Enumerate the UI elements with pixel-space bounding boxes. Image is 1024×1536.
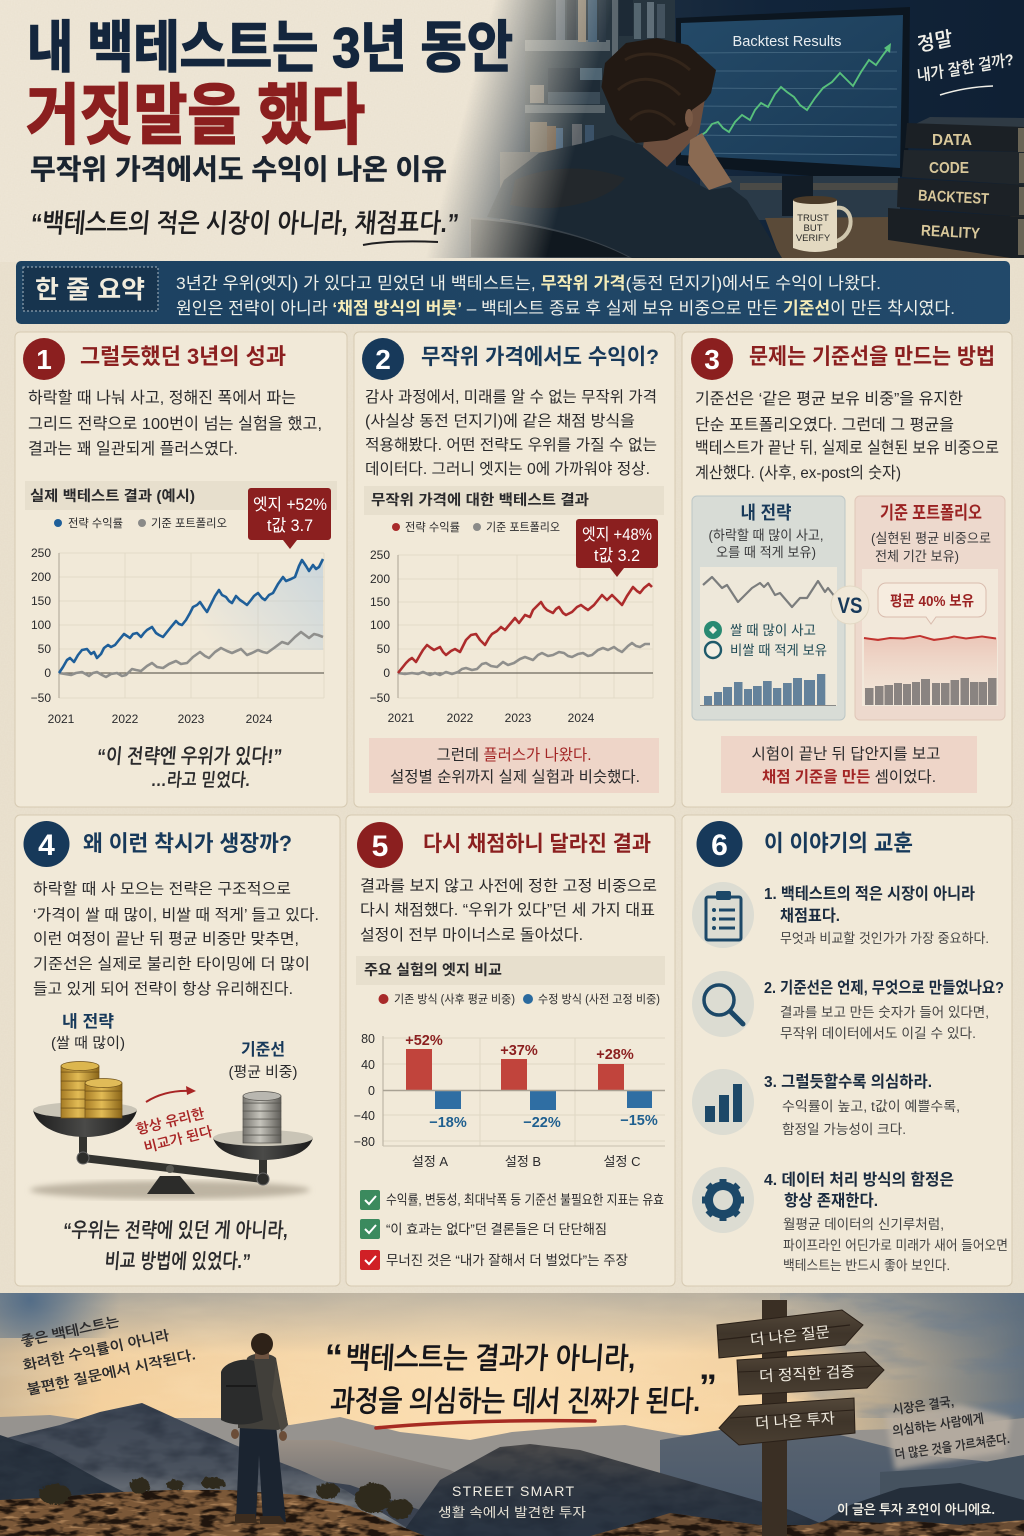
lesson 1: 1. 백테스트의 적은 시장이 아니라: [764, 885, 975, 903]
chart: real backtest result: −50: [31, 691, 51, 705]
icon: office chair: [470, 218, 632, 258]
bar chart: edge comparison: 0: [368, 1084, 375, 1098]
bar chart: edge comparison: −15%: [620, 1113, 658, 1129]
panel 2: profit even on random prices: [354, 332, 675, 807]
chart: real backtest result: 50: [38, 642, 51, 656]
handwritten note: did I really do well: 내가 잘한 걸까?: [916, 50, 1015, 85]
icon: bookshelves behind the analyst: [500, 0, 675, 227]
check item: metrics: [360, 1190, 664, 1210]
chart: real backtest result: 2023: [178, 712, 205, 726]
legend: [378, 993, 660, 1006]
sign: better question: [717, 1310, 863, 1358]
VS badge: [831, 586, 869, 624]
bar chart: edge comparison: 설정 C: [604, 1154, 640, 1169]
icon: stacked books: [888, 117, 1024, 258]
footer main quote: 백테스트는 결과가 아니라,: [345, 1343, 637, 1375]
handwritten note: did I really do well: [916, 27, 1015, 95]
footer main quote: 과정을 의심하는 데서 진짜가 된다.: [330, 1386, 702, 1418]
label: baseline: [228, 1040, 298, 1081]
body 5: [360, 877, 657, 944]
chart: backtest on random prices: 2024: [568, 711, 595, 725]
body 3: 백테스트가 끝난 뒤, 실제로 실현된 보유 비중으로: [695, 439, 999, 457]
panel 4: why the illusion arises: [15, 815, 340, 1286]
icon: bar chart: [692, 1069, 754, 1135]
icon: stacked books: CODE: [929, 160, 969, 177]
lesson 3: 3. 그럴듯할수록 의심하라.: [764, 1073, 932, 1091]
bar chart: edge comparison: −80: [354, 1135, 375, 1149]
heading 2: 무작위 가격에서도 수익이?: [421, 345, 659, 369]
callout: edge +48%: t값 3.2: [594, 546, 640, 565]
chart: real backtest result: 실제 백테스트 결과 (예시): [30, 488, 195, 505]
handwritten label: always favourable comparison: [134, 1106, 214, 1155]
quote 1: “이 전략엔 우위가 있다!”: [96, 746, 283, 768]
lesson 2: 결과를 보고 만든 숫자가 들어 있다면,: [780, 1005, 989, 1020]
number badge 1: [23, 338, 65, 380]
footer scene: hiker, mountains and signpost: [0, 1293, 1024, 1536]
icon: stacked books: BACKTEST: [918, 187, 990, 208]
heading 6: 이 이야기의 교훈: [764, 831, 913, 856]
lesson 1: 채점표다.: [780, 907, 840, 925]
quote 1: [96, 746, 283, 790]
legend: 전략 수익률: [405, 521, 460, 534]
footer note right: 시장은 결국,: [891, 1395, 955, 1417]
footer note left: 화려한 수익률이 아니라: [22, 1328, 171, 1373]
body 5: 설정이 전부 마이너스로 돌아섰다.: [360, 926, 583, 944]
note: plus came out: 그런데 플러스가 나왔다.: [436, 746, 592, 764]
footer note right: 의심하는 사람에게: [892, 1412, 985, 1438]
legend: 기존 방식 (사후 평균 비중): [394, 993, 515, 1006]
check item: no effect: [360, 1219, 607, 1239]
lesson 2: 2. 기준선은 언제, 무엇으로 만들었나요?: [764, 979, 1004, 997]
body 2: 데이터다. 그러니 엣지는 0에 가까워야 정상.: [365, 460, 650, 478]
chart: real backtest result: 100: [31, 618, 51, 632]
label: my strategy: [51, 1012, 125, 1052]
chart: backtest on random prices: 0: [383, 666, 390, 680]
footer note left: [20, 1314, 197, 1398]
legend: 기준 포트폴리오: [486, 521, 560, 534]
footer main quote: [325, 1338, 717, 1428]
chart: backtest on random prices: 2022: [447, 711, 474, 725]
comparison card: my strategy: 내 전략: [740, 503, 792, 523]
chart: real backtest result: 250: [31, 546, 51, 560]
handwritten label: always favourable comparison: 항상 유리한: [134, 1106, 206, 1137]
number badge 2: 2: [375, 344, 391, 375]
icon: trust but verify mug: [793, 196, 851, 252]
comparison card: my strategy: 오를 때 적게 보유): [716, 545, 816, 560]
quote 4: 비교 방법에 있었다.”: [104, 1251, 251, 1273]
rocky ground: [0, 1485, 1024, 1536]
number badge 3: 3: [704, 344, 720, 375]
icon: trust but verify mug: BUT: [804, 223, 823, 234]
footer note left: 좋은 백테스트는: [20, 1314, 121, 1349]
note: made the answer key after the exam: 채점 기준을 만든 셈이었다.: [762, 768, 936, 786]
lesson 3: 수익률이 높고, t값이 예쁠수록,: [782, 1099, 960, 1114]
number badge 4: [24, 821, 70, 867]
brand: 생활 속에서 발견한 투자: [438, 1505, 586, 1520]
icon: stacked books: REALITY: [921, 222, 981, 243]
legend: [392, 521, 560, 534]
chart: backtest on random prices: 100: [370, 618, 390, 632]
footer note right: 더 많은 것을 가르쳐준다.: [894, 1432, 1011, 1462]
body 5: 결과를 보지 않고 사전에 정한 고정 비중으로: [360, 877, 657, 895]
title: 내 백테스트는 3년 동안: [27, 16, 513, 79]
arrow: tilt direction: [146, 1086, 196, 1102]
body 3: 단순 포트폴리오였다. 그런데 그 평균을: [695, 416, 954, 434]
footer main quote: ”: [699, 1368, 717, 1406]
legend: 기준 포트폴리오: [151, 517, 227, 530]
chart: backtest on random prices: 무작위 가격에 대한 백테스트 결과: [371, 492, 589, 509]
number badge 1: 1: [36, 344, 52, 375]
comparison card: baseline portfolio: [855, 496, 1005, 720]
icon: stacked books: DATA: [932, 132, 972, 149]
chart: backtest on random prices: 250: [370, 548, 390, 562]
comparison card: my strategy: 비쌀 때 적게 보유: [730, 643, 827, 658]
comparison card: baseline portfolio: (실현된 평균 비중으로: [871, 531, 991, 546]
brand: STREET SMART: [452, 1483, 574, 1499]
heading 1: 그럴듯했던 3년의 성과: [80, 344, 286, 369]
sign: better question: 더 나은 질문: [749, 1324, 831, 1349]
icon: monitor with backtest chart: Backtest Results: [732, 33, 842, 50]
number badge 4: 4: [38, 829, 55, 862]
distant mountains: [0, 1415, 1024, 1473]
quote 4: “우위는 전략에 있던 게 아니라,: [62, 1220, 289, 1242]
body 2: [365, 388, 657, 478]
bar chart: edge comparison: 설정 A: [412, 1154, 448, 1169]
heading 4: 왜 이런 착시가 생장까?: [83, 831, 292, 856]
lesson 4: 백테스트는 반드시 좋아 보인다.: [783, 1258, 950, 1273]
check item: what collapsed: [360, 1250, 628, 1270]
body 2: 감사 과정에서, 미래를 알 수 없는 무작위 가격: [365, 388, 657, 406]
chart: backtest on random prices: 2021: [388, 711, 415, 725]
check item: metrics: 수익률, 변동성, 최대낙폭 등 기준선 불필요한 지표는 유효: [386, 1192, 664, 1208]
chart: real backtest result: 2022: [112, 712, 139, 726]
lesson 4: [692, 1167, 1008, 1273]
body 3: 기준선은 ‘같은 평균 보유 비중”을 유지한: [695, 390, 963, 408]
chart: real backtest result: [25, 481, 337, 726]
label: baseline: 기준선: [241, 1040, 285, 1059]
callout: edge +48%: [576, 519, 658, 577]
heading 5: 다시 채점하니 달라진 결과: [423, 832, 651, 856]
check item: no effect: “이 효과는 없다”던 결론들은 더 단단해짐: [386, 1222, 607, 1237]
bar chart: edge comparison: [354, 956, 665, 1169]
heading 3: 문제는 기준선을 만드는 방법: [749, 344, 995, 369]
comparison card: baseline portfolio: 전체 기간 보유): [875, 549, 959, 564]
lesson 2: [692, 971, 1004, 1041]
body 3: [695, 390, 999, 482]
callout: edge +48%: 엣지 +48%: [582, 525, 652, 544]
icon: analyst seen from behind: [487, 38, 782, 258]
body 3: 계산했다. (사후, ex-post의 숫자): [695, 464, 901, 482]
chart: real backtest result: 2021: [48, 712, 75, 726]
panel 6: lessons of this story: [682, 815, 1012, 1286]
bar chart: edge comparison: 설정 B: [505, 1154, 541, 1169]
label: my strategy: (쌀 때 많이): [51, 1035, 125, 1052]
chart: backtest on random prices: −50: [370, 691, 390, 705]
summary text: 원인은 전략이 아니라 ‘채점 방식의 버릇’ – 백테스트 종료 후 실제 보유 비중으로 만든 기준선이 만든 착시였다.: [176, 299, 955, 318]
body 4: 들고 있게 되어 전략이 항상 유리해진다.: [33, 980, 293, 998]
body 1: 그리드 전략으로 100번이 넘는 실험을 했고,: [28, 415, 322, 433]
shrubs on the ridge: [39, 1477, 413, 1519]
panel 1: plausible three-year performance: [15, 332, 347, 807]
lesson 1: 무엇과 비교할 것인가가 가장 중요하다.: [780, 931, 989, 946]
chart: real backtest result: 150: [31, 594, 51, 608]
bar chart: edge comparison: −22%: [523, 1115, 561, 1131]
chart: real backtest result: 0: [44, 666, 51, 680]
header quote: “백테스트의 적은 시장이 아니라, 채점표다.”: [29, 208, 460, 238]
body 4: 기준선은 실제로 불리한 타이밍에 더 많이: [33, 955, 310, 973]
sign: more honest verification: 더 정직한 검증: [759, 1363, 855, 1385]
body 4: [33, 880, 319, 998]
callout: average 40%: [878, 583, 986, 624]
number badge 6: [696, 821, 742, 867]
callout: average 40%: 평균 40% 보유: [890, 593, 974, 610]
handwritten label: always favourable comparison: 비교가 된다: [142, 1124, 214, 1155]
body 5: 다시 채점했다. “우위가 있다”던 세 가지 대표: [360, 901, 655, 919]
chart: backtest on random prices: 200: [370, 572, 390, 586]
title: [26, 16, 513, 152]
body 2: (사실상 동전 던지기)에 같은 채점 방식을: [365, 412, 635, 430]
body 4: 하락할 때 사 모으는 전략은 구조적으로: [33, 880, 291, 898]
callout: edge +52%: [248, 488, 331, 549]
callout: edge +52%: 엣지 +52%: [253, 495, 327, 514]
footer note left: 불편한 질문에서 시작된다.: [25, 1347, 197, 1398]
bar chart: edge comparison: 40: [361, 1058, 375, 1072]
chart: backtest on random prices: 150: [370, 595, 390, 609]
icon: wooden signpost: [717, 1300, 884, 1536]
summary badge: [23, 267, 158, 311]
lesson 4: 항상 존재한다.: [784, 1192, 878, 1210]
body 1: [28, 389, 322, 458]
lesson 4: 파이프라인 어딘가로 미래가 새어 들어오면: [783, 1238, 1008, 1253]
note: plus came out: [369, 738, 659, 793]
lesson 4: 4. 데이터 처리 방식의 함정은: [764, 1171, 954, 1189]
header illustration: analyst looking at backtest monitor: [400, 0, 1024, 258]
sign: better investing: 더 나은 투자: [755, 1410, 836, 1433]
icon: tilted balance scale with coins: [30, 1062, 313, 1199]
comparison card: my strategy: [692, 496, 845, 720]
legend: 수정 방식 (사전 고정 비중): [538, 993, 660, 1006]
summary text: [176, 274, 955, 318]
bar chart: edge comparison: −40: [354, 1109, 375, 1123]
sign: more honest verification: [737, 1352, 884, 1395]
note: plus came out: 설정별 순위까지 실제 실험과 비슷했다.: [390, 768, 640, 786]
icon: hiker with backpack: [221, 1333, 288, 1524]
summary text: 3년간 우위(엣지) 가 있다고 믿었던 내 백테스트는, 무작위 가격(동전 던지기)에서도 수익이 나왔다.: [176, 274, 881, 293]
comparison card: my strategy: (하락할 때 많이 사고,: [708, 528, 824, 543]
panel 3: how the baseline is built: [682, 332, 1012, 807]
icon: clipboard: [692, 882, 754, 948]
chart: backtest on random prices: 2023: [505, 711, 532, 725]
sign: better investing: [719, 1398, 855, 1445]
legend: [54, 517, 227, 530]
handwritten note: did I really do well: 정말: [916, 27, 954, 57]
icon: monitor with backtest chart: [676, 7, 1024, 258]
bar chart: edge comparison: −18%: [429, 1115, 467, 1131]
lesson 3: 함정일 가능성이 크다.: [782, 1122, 906, 1137]
label: baseline: (평균 비중): [228, 1064, 298, 1081]
disclaimer: 이 글은 투자 조언이 아니에요.: [837, 1502, 995, 1517]
body 2: 적용해봤다. 어떤 전략도 우위를 가질 수 없는: [365, 436, 657, 454]
number badge 3: [691, 338, 733, 380]
bar chart: edge comparison: +37%: [500, 1043, 538, 1059]
legend: 전략 수익률: [68, 517, 123, 530]
bar chart: edge comparison: +52%: [405, 1033, 443, 1049]
check item: what collapsed: 무너진 것은 “내가 잘해서 더 벌었다”는 주장: [386, 1253, 628, 1268]
comparison card: baseline portfolio: 기준 포트폴리오: [880, 503, 982, 523]
footer note right: [891, 1395, 1011, 1462]
summary banner: [16, 261, 1010, 324]
subtitle: 무작위 가격에서도 수익이 나온 이유: [30, 154, 447, 185]
body 4: ‘가격이 쌀 때 많이, 비쌀 때 적게’ 들고 있다.: [33, 906, 319, 924]
VS badge: VS: [838, 593, 862, 618]
note: made the answer key after the exam: [721, 736, 977, 793]
icon: trust but verify mug: VERIFY: [796, 233, 831, 244]
chart: backtest on random prices: [364, 486, 664, 725]
title: 거짓말을 했다: [26, 78, 365, 152]
number badge 5: [357, 822, 403, 868]
quote 4: [62, 1220, 289, 1273]
lesson 3: [692, 1069, 960, 1137]
number badge 6: 6: [711, 829, 728, 862]
panel 5: different result after rescoring: [346, 815, 675, 1286]
checklist: [360, 1190, 664, 1270]
icon: gear: [692, 1167, 754, 1233]
summary badge: 한 줄 요약: [35, 276, 145, 304]
chart: real backtest result: 2024: [246, 712, 273, 726]
body 4: 이런 여정이 끝난 뒤 평균 비중만 맞추면,: [33, 930, 299, 948]
icon: trust but verify mug: TRUST: [797, 213, 829, 224]
bar chart: edge comparison: 80: [361, 1032, 375, 1046]
chart: real backtest result: 200: [31, 570, 51, 584]
number badge 2: [362, 338, 404, 380]
body 1: 결과는 꽤 일관되게 플러스였다.: [28, 440, 238, 458]
lesson 1: [692, 882, 989, 948]
label: my strategy: 내 전략: [62, 1012, 114, 1031]
footer main quote: “: [325, 1338, 343, 1376]
chart: backtest on random prices: 50: [377, 642, 390, 656]
comparison card: my strategy: 쌀 때 많이 사고: [730, 623, 816, 638]
quote 1: …라고 믿었다.: [150, 770, 251, 790]
bar chart: edge comparison: +28%: [596, 1047, 634, 1063]
number badge 5: 5: [372, 830, 388, 863]
lesson 2: 무작위 데이터에서도 이길 수 있다.: [780, 1026, 976, 1041]
brand: [438, 1483, 586, 1520]
icon: magnifying glass: [692, 971, 754, 1037]
callout: edge +52%: t값 3.7: [267, 516, 313, 535]
note: made the answer key after the exam: 시험이 끝난 뒤 답안지를 보고: [752, 745, 940, 763]
bar chart: edge comparison: 주요 실험의 엣지 비교: [364, 962, 502, 979]
body 1: 하락할 때 나눠 사고, 정해진 폭에서 파는: [28, 389, 296, 407]
lesson 4: 월평균 데이터의 신기루처럼,: [783, 1217, 944, 1232]
